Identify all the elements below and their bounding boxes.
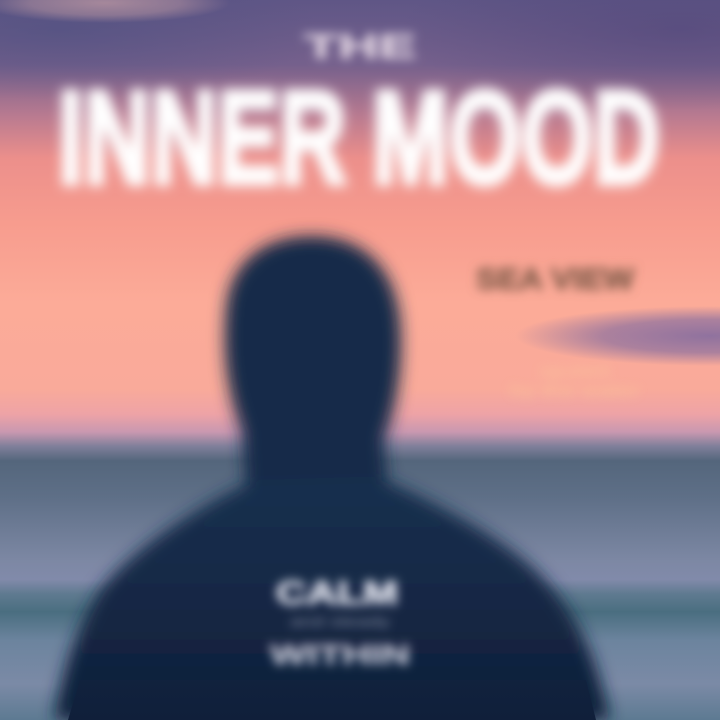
faint caption under side label: by the water	[510, 383, 641, 400]
text printed on back: and steady	[290, 614, 391, 629]
purple cloud on the right	[515, 306, 720, 366]
faint caption under side label	[510, 363, 641, 400]
hooded figure from behind	[54, 236, 610, 720]
side label: SEA VIEW	[476, 263, 635, 296]
faint caption under side label: quiet	[540, 363, 611, 380]
figure shoulders and back	[54, 480, 610, 720]
text printed on back	[270, 575, 410, 670]
pale cloud streak at top left	[0, 0, 230, 23]
text printed on back: WITHIN	[270, 639, 410, 670]
figure head and hood	[225, 236, 401, 492]
figure base at lower edge	[68, 680, 596, 720]
text printed on back: CALM	[276, 575, 398, 611]
subtitle above title: THE	[304, 28, 416, 66]
dusk shading at top corners of sky	[0, 0, 720, 110]
